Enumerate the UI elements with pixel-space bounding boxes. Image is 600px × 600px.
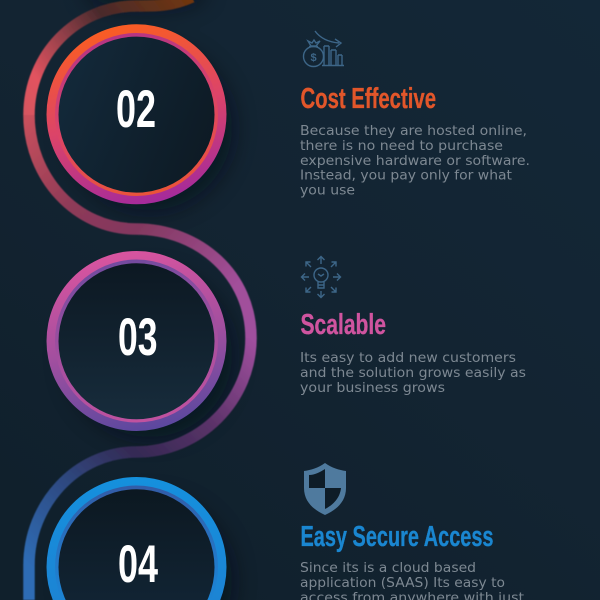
text block: cost effective — [300, 124, 530, 198]
number 03: 03 — [118, 308, 158, 367]
text block: scalable: and the solution grows easily as — [300, 366, 526, 381]
heading: Scalable: Scalable — [300, 309, 386, 341]
text block: cost effective: expensive hardware or software. — [300, 154, 530, 169]
icon: shield — [304, 463, 346, 515]
text block: easy secure access: Since its is a cloud based — [300, 561, 476, 576]
text block: scalable: your business grows — [300, 381, 445, 396]
icon: money bag with falling chart: $ — [310, 52, 317, 64]
text block: scalable — [300, 351, 526, 396]
text block: easy secure access: application (SAAS) Its easy to — [300, 576, 505, 591]
text block: cost effective: Because they are hosted online, — [300, 124, 527, 139]
text block: cost effective: there is no need to purchase — [300, 139, 503, 154]
circle 04 — [46, 477, 226, 600]
icon: light bulb with arrows — [302, 256, 340, 298]
winding connector path — [29, 0, 251, 600]
number 04: 04 — [118, 535, 158, 594]
text block: cost effective: you use — [300, 184, 355, 198]
number 02: 02 — [116, 80, 156, 139]
text block: scalable: Its easy to add new customers — [300, 351, 516, 366]
connector shadows — [68, 0, 232, 600]
circle 03 — [46, 251, 226, 431]
heading: Cost Effective: Cost Effective — [300, 83, 436, 115]
icon: money bag with falling chart — [304, 31, 344, 66]
text block: cost effective: Instead, you pay only for what — [300, 168, 512, 184]
circle 02 — [46, 24, 226, 204]
text block: easy secure access — [300, 561, 524, 600]
heading: Easy Secure Access: Easy Secure Access — [300, 521, 494, 553]
